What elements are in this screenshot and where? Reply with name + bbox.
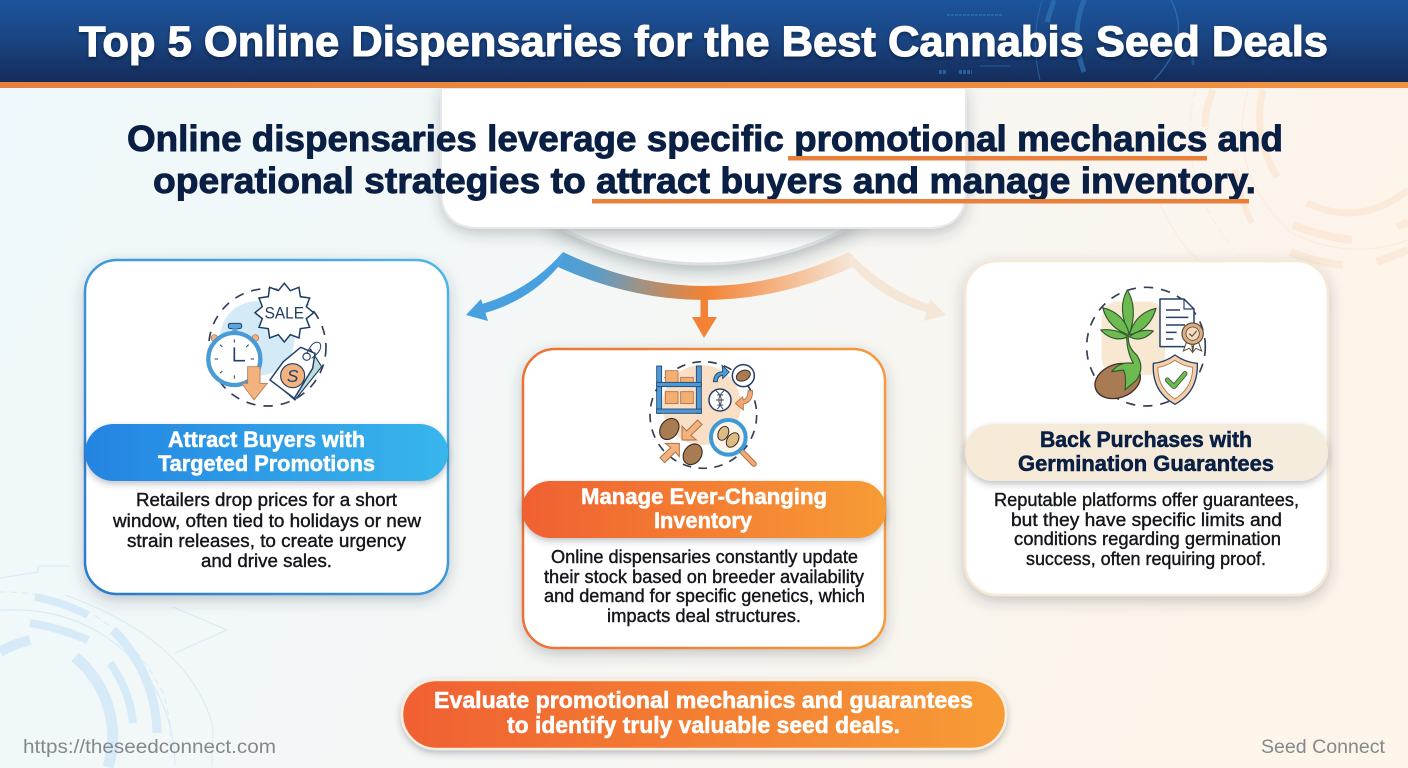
body text: impacts deal structures. <box>607 606 801 626</box>
body text: Retailers drop prices for a short <box>136 490 397 510</box>
title: Top 5 Online Dispensaries for the Best Cannabis Seed Deals <box>79 18 1328 66</box>
panel: manage inventory <box>522 349 886 648</box>
branching arrows <box>466 252 946 338</box>
heading pill: Germination Guarantees <box>1018 451 1274 476</box>
footer url: https://theseedconnect.com <box>23 737 276 758</box>
heading pill <box>85 424 448 481</box>
body text <box>544 547 865 626</box>
body text <box>112 490 422 571</box>
heading pill: Attract Buyers with <box>168 427 365 452</box>
body text: conditions regarding germination <box>1014 529 1281 549</box>
callout: bottom takeaway: to identify truly valuable seed deals. <box>507 712 900 738</box>
intro statement: operational strategies to attract buyers and manage inventory. <box>153 160 1256 201</box>
body text: and demand for specific genetics, which <box>544 586 865 606</box>
body text: and drive sales. <box>201 551 332 571</box>
heading pill: Targeted Promotions <box>158 451 375 476</box>
heading pill: Manage Ever-Changing <box>581 484 827 509</box>
body text: but they have specific limits and <box>1011 510 1282 530</box>
background tech rings: top right <box>1160 90 1408 265</box>
body text: window, often tied to holidays or new <box>112 511 422 531</box>
intro statement <box>127 118 1283 204</box>
background tech rings: bottom left <box>0 566 227 767</box>
icon: sprout document and shield <box>1087 287 1205 406</box>
body text: strain releases, to create urgency <box>127 531 406 551</box>
intro statement: Online dispensaries leverage specific promotional mechanics and <box>127 118 1283 159</box>
callout: bottom takeaway <box>402 680 1006 749</box>
intro white panel <box>441 88 966 228</box>
header banner <box>0 0 1408 88</box>
body text: Online dispensaries constantly update <box>551 547 858 567</box>
heading pill <box>522 481 886 538</box>
hanging bowl under intro box <box>548 222 860 264</box>
callout: bottom takeaway: Evaluate promotional mechanics and guarantees <box>434 687 973 713</box>
icon: sale stopwatch and price tag: S <box>287 366 299 386</box>
footer brand: Seed Connect <box>1261 737 1386 758</box>
heading pill <box>965 424 1328 481</box>
body text: success, often requiring proof. <box>1026 549 1266 569</box>
panel: germination guarantees <box>965 261 1328 595</box>
icon: sale stopwatch and price tag: SALE <box>265 304 304 323</box>
heading pill: Inventory <box>654 508 752 533</box>
body text: their stock based on breeder availability <box>544 567 864 587</box>
body text <box>994 490 1299 569</box>
icon: sale stopwatch and price tag <box>208 283 326 406</box>
heading pill: Back Purchases with <box>1040 427 1252 452</box>
icon: shelves seeds and magnifier <box>650 362 757 468</box>
body text: Reputable platforms offer guarantees, <box>994 490 1299 510</box>
panel: attract buyers <box>85 260 448 594</box>
